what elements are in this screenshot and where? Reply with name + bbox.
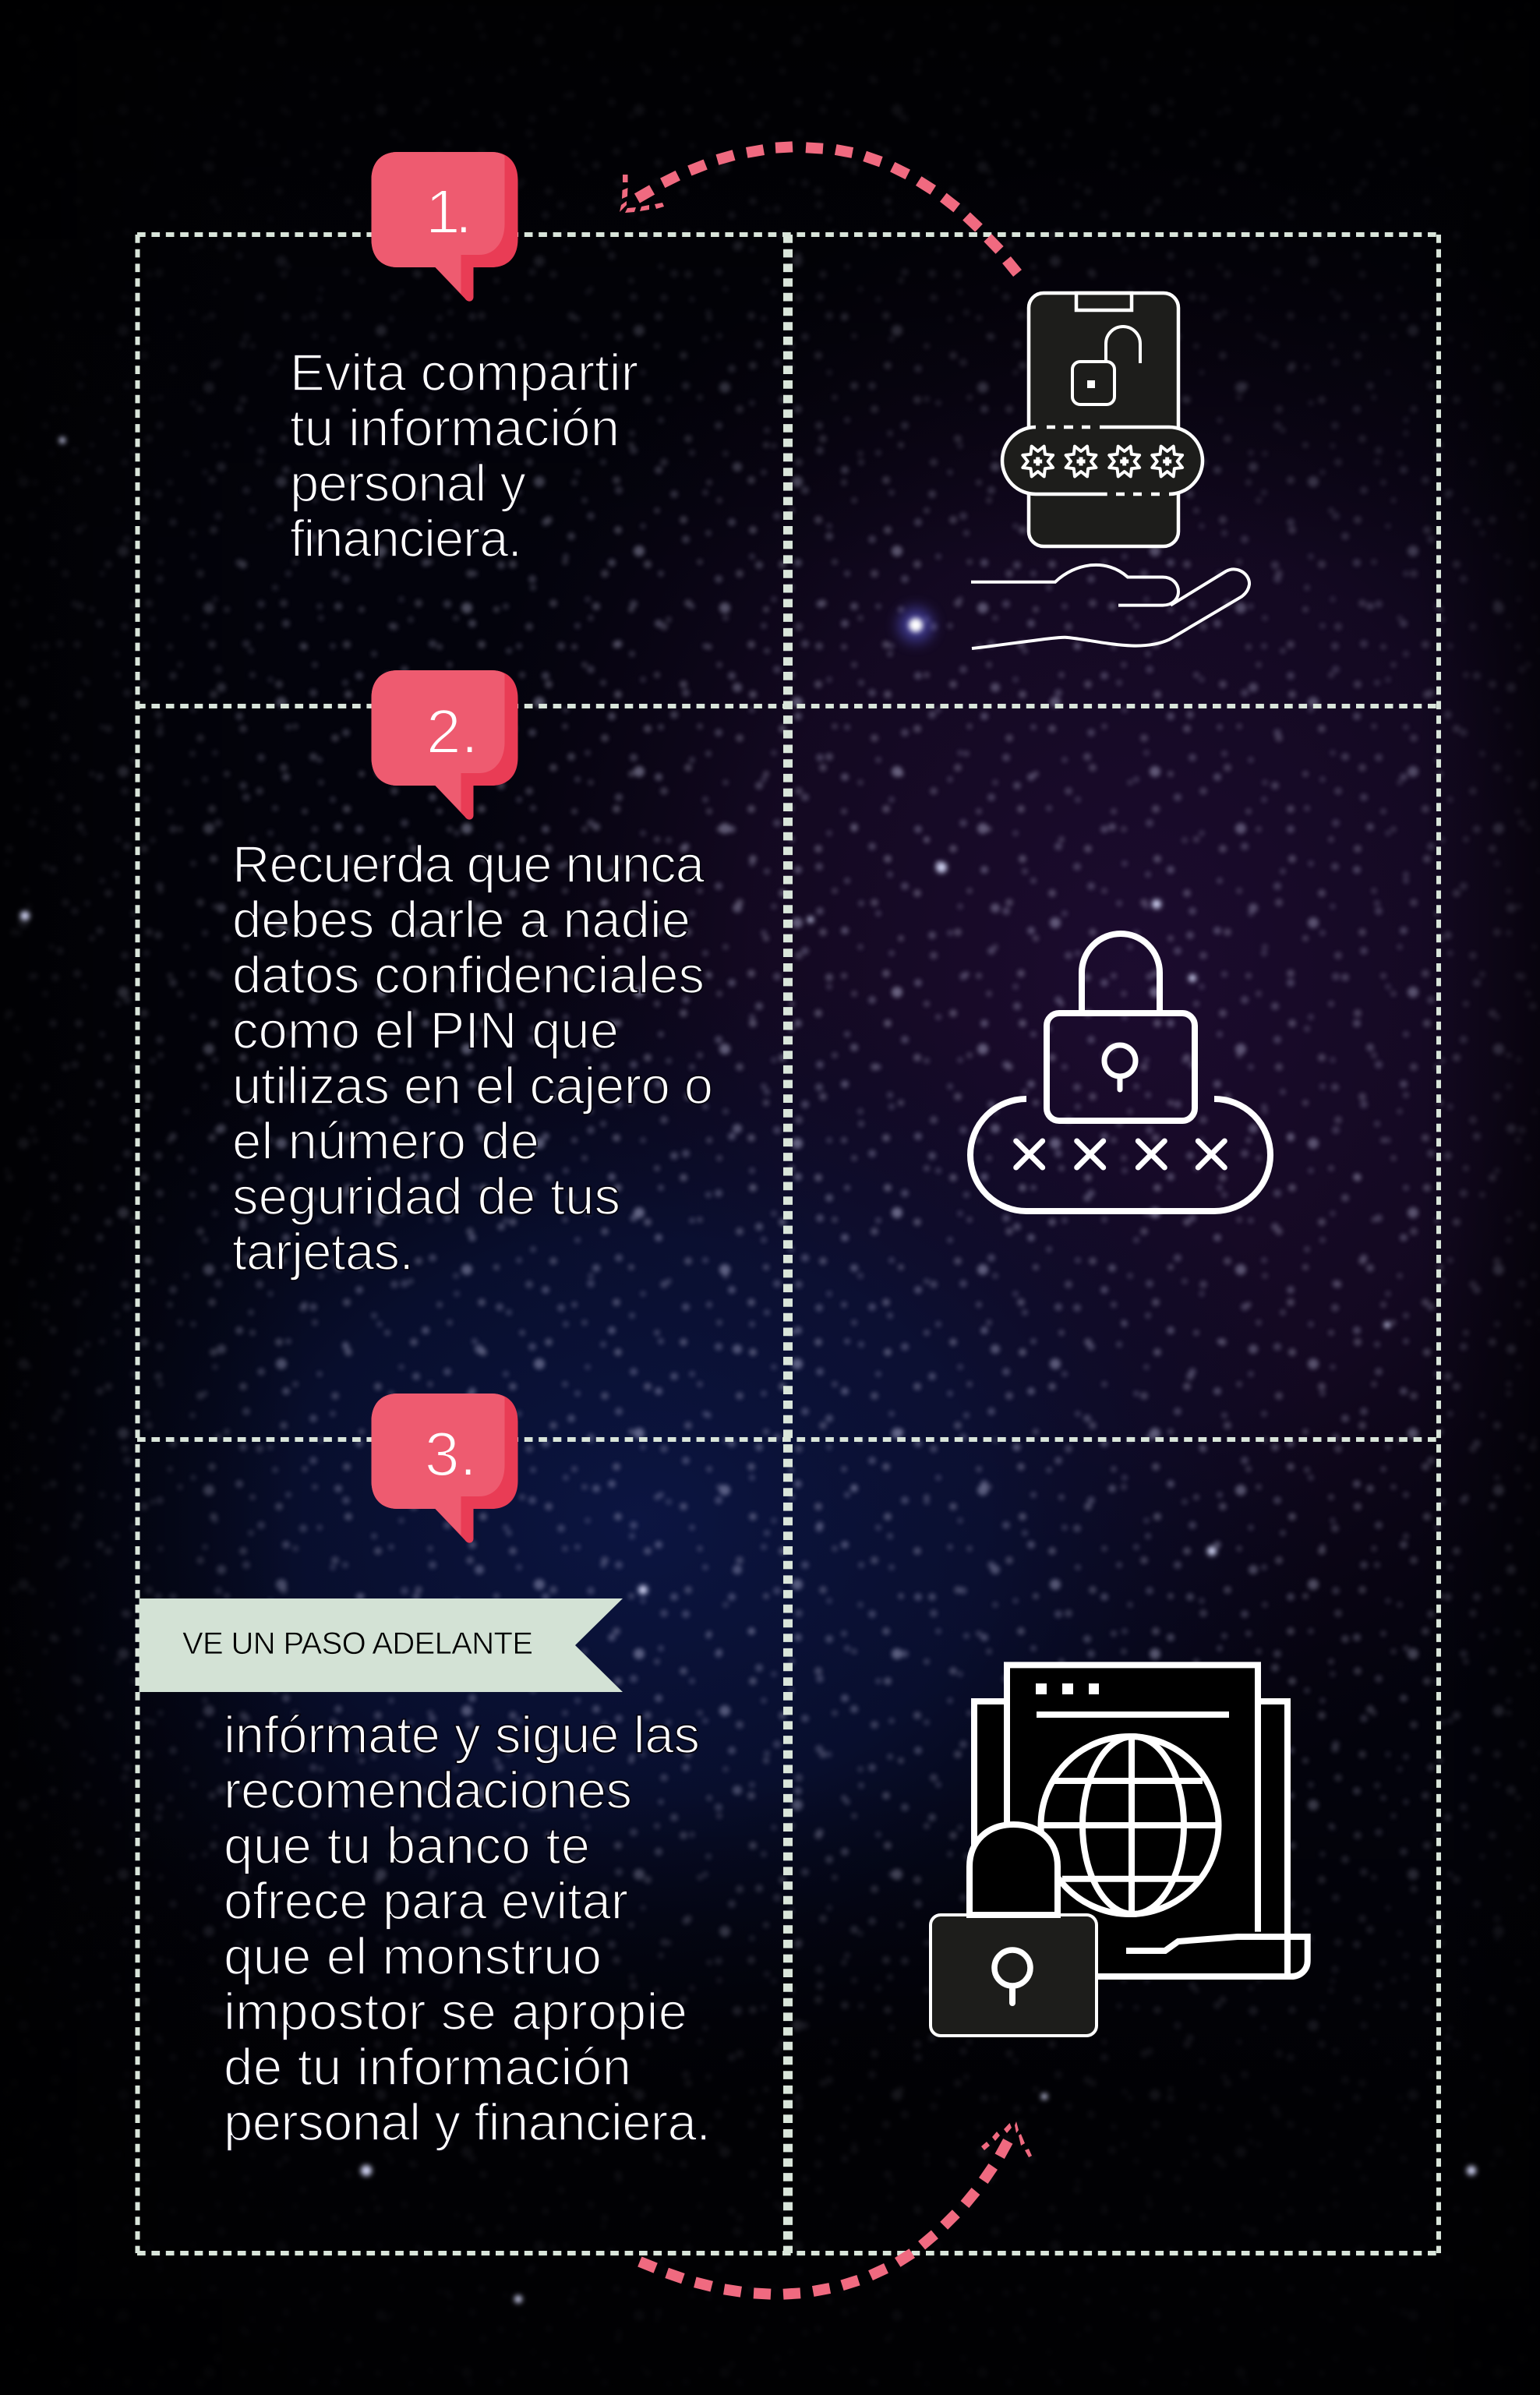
text block: step 2: Recuerda que nunca (232, 835, 705, 894)
text block: step 3: de tu información (224, 2038, 631, 2097)
text block: step 3: personal y financiera. (224, 2093, 711, 2152)
text block: step 3: impostor se apropie (224, 1983, 687, 2041)
icon: phone with open lock and hidden password on a hand (971, 293, 1249, 648)
text block: step 2: seguridad de tus (232, 1167, 620, 1226)
arrow: bottom curved dashed (640, 2121, 1032, 2294)
text block: step 2: datos confidenciales (232, 946, 705, 1005)
badge: step 1: 1. (426, 177, 472, 246)
text block: step 1: tu información (290, 399, 620, 457)
dashed table frame (137, 235, 1439, 2253)
text block: step 2: tarjetas. (232, 1223, 414, 1281)
text block: step 2: debes darle a nadie (232, 891, 691, 949)
text block: step 3: recomendaciones (224, 1761, 632, 1820)
text block: step 1: personal y (290, 454, 527, 513)
badge: step 3: 3. (425, 1419, 477, 1489)
text block: step 3 (224, 1706, 711, 2152)
text block: step 2 (232, 835, 713, 1281)
arrow: top curved dashed (620, 147, 1018, 274)
ribbon: ve un paso adelante: VE UN PASO ADELANTE (182, 1627, 533, 1661)
badge: step 3 (371, 1394, 517, 1543)
icon: padlock with masked password (970, 934, 1270, 1211)
text block: step 1: Evita compartir (290, 344, 638, 402)
icon: browser window with globe and padlock (931, 1665, 1308, 2036)
text block: step 3: que tu banco te (224, 1817, 590, 1875)
text block: step 1: financiera. (290, 510, 522, 568)
text block: step 1 (290, 344, 638, 568)
text block: step 2: como el PIN que (232, 1001, 619, 1060)
text block: step 2: utilizas en el cajero o (232, 1057, 713, 1115)
ribbon: ve un paso adelante (140, 1598, 623, 1692)
badge: step 2: 2. (426, 697, 479, 766)
badge: step 2 (371, 670, 517, 820)
text block: step 3: infórmate y sigue las (224, 1706, 700, 1764)
text block: step 3: ofrece para evitar (224, 1872, 628, 1930)
badge: step 1 (371, 152, 517, 302)
text block: step 2: el número de (232, 1112, 539, 1171)
text block: step 3: que el monstruo (224, 1927, 602, 1986)
